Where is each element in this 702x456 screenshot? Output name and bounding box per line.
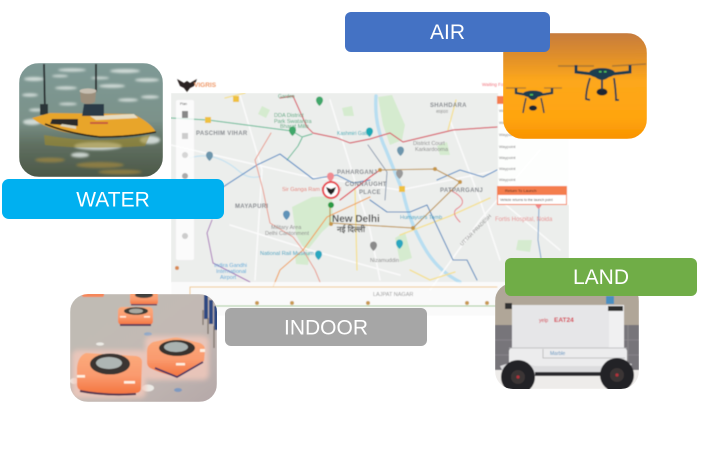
map place labels: Park Swatantra: [274, 119, 313, 125]
map place labels: Karkardooma: [415, 147, 449, 153]
label: air: AIR: [430, 21, 465, 44]
front robot: [77, 353, 142, 395]
label: water: [2, 179, 224, 219]
map place labels: SHAHDARA: [430, 103, 467, 109]
large drone: [558, 64, 646, 100]
map place labels: PATPARGANJ: [440, 188, 483, 194]
right waypoint panel: Waypoint: [499, 120, 516, 125]
robot body: [606, 304, 610, 310]
map place labels: [196, 94, 553, 281]
label: land: [505, 258, 697, 296]
map location pins: [206, 97, 542, 260]
label: air: [345, 12, 550, 52]
map place labels: UTTAR PRADESH: [459, 213, 493, 247]
map place labels: PASCHIM VIHAR: [196, 131, 248, 137]
map place labels: District Court: [413, 141, 445, 147]
return to launch dialog: Return To Launch: [505, 188, 537, 193]
photo: land delivery robot: EAT24: [554, 317, 574, 324]
chairs in background: [204, 295, 218, 330]
photo: air drones: [503, 33, 647, 139]
label: land: LAND: [573, 266, 629, 289]
map place labels: Bharat Mills: [280, 124, 309, 130]
photo: land delivery robot: Marble: [550, 351, 566, 357]
map place labels: शाहदरा: [436, 109, 449, 114]
map place labels: Indira Gandhi: [214, 263, 247, 269]
right waypoint panel: Waypoint: [499, 166, 516, 171]
map place labels: DDA District: [274, 113, 304, 119]
right waypoint panel: Waypoint: [499, 144, 516, 149]
map place labels: CONNAUGHT: [345, 182, 387, 188]
boat hull: [32, 113, 156, 137]
label: indoor: [225, 308, 427, 346]
software header with logo: Waiting For: [482, 82, 505, 87]
return to launch dialog: Vehicle returns to the launch point: [500, 198, 553, 202]
far robots: [82, 294, 158, 306]
map place labels: नई दिल्ली: [336, 224, 366, 234]
map place labels: International: [216, 269, 246, 275]
map place labels: Kashmiri Gate: [337, 131, 369, 137]
right waypoint panel: Waypoint: [499, 132, 516, 137]
right robot: [147, 338, 205, 377]
boat dome and electronics: [80, 92, 96, 104]
floor markings: [70, 342, 154, 392]
map place labels: Nizamuddin: [370, 258, 399, 264]
map place labels: PAHARGANJ: [337, 170, 377, 176]
map place labels: Sir Ganga Ram Hospital: [282, 187, 341, 193]
map place labels: National Rail Museum: [260, 251, 314, 257]
map place labels: Garden: [278, 94, 295, 100]
metro lines: [280, 96, 497, 143]
parks: [258, 95, 532, 265]
right waypoint panel: Waypoint: [499, 108, 516, 113]
river Yamuna: [376, 96, 460, 282]
minor white and yellow roads: [171, 95, 560, 290]
small drone: [506, 88, 562, 113]
right waypoint panel: Waypoint: [499, 155, 516, 160]
label: indoor: INDOOR: [284, 316, 368, 340]
vehicle marker pin: [323, 182, 339, 208]
right waypoint panel: [497, 93, 569, 205]
photo: water surface vehicle: [19, 63, 163, 177]
label: water: WATER: [76, 188, 150, 212]
map place labels: Airport: [220, 275, 237, 281]
left map toolbar: [176, 100, 194, 260]
bottom mission timeline: LAJPAT NAGAR: [373, 292, 413, 298]
return to launch dialog: [497, 186, 567, 205]
software header with logo: [177, 79, 505, 92]
map place labels: PLACE: [359, 190, 381, 196]
map place labels: MAYAPURI: [235, 204, 268, 210]
map place labels: Humayun's Tomb: [400, 215, 442, 221]
boat masts: [44, 64, 96, 112]
photo: indoor warehouse robots: [70, 291, 218, 402]
robot glow on floor: [72, 336, 209, 398]
robot wheels: [500, 358, 635, 389]
left map toolbar: Plan: [180, 102, 187, 106]
right waypoint panel: Waypoint: [499, 177, 516, 182]
bottom mission timeline: [171, 282, 505, 316]
software header with logo: VIGRIS: [194, 82, 217, 89]
photo: land delivery robot: [495, 283, 639, 394]
planned route in gold and red: [330, 169, 460, 228]
map place labels: Military Area: [271, 225, 302, 231]
map place labels: Fortis Hospital, Noida: [495, 217, 553, 223]
middle robot: [118, 307, 153, 326]
map panel: [171, 93, 569, 316]
map place labels: New Delhi: [332, 214, 380, 225]
map place labels: Delhi Cantonment: [265, 231, 309, 237]
EAT24 branding: yelp: [539, 318, 548, 324]
